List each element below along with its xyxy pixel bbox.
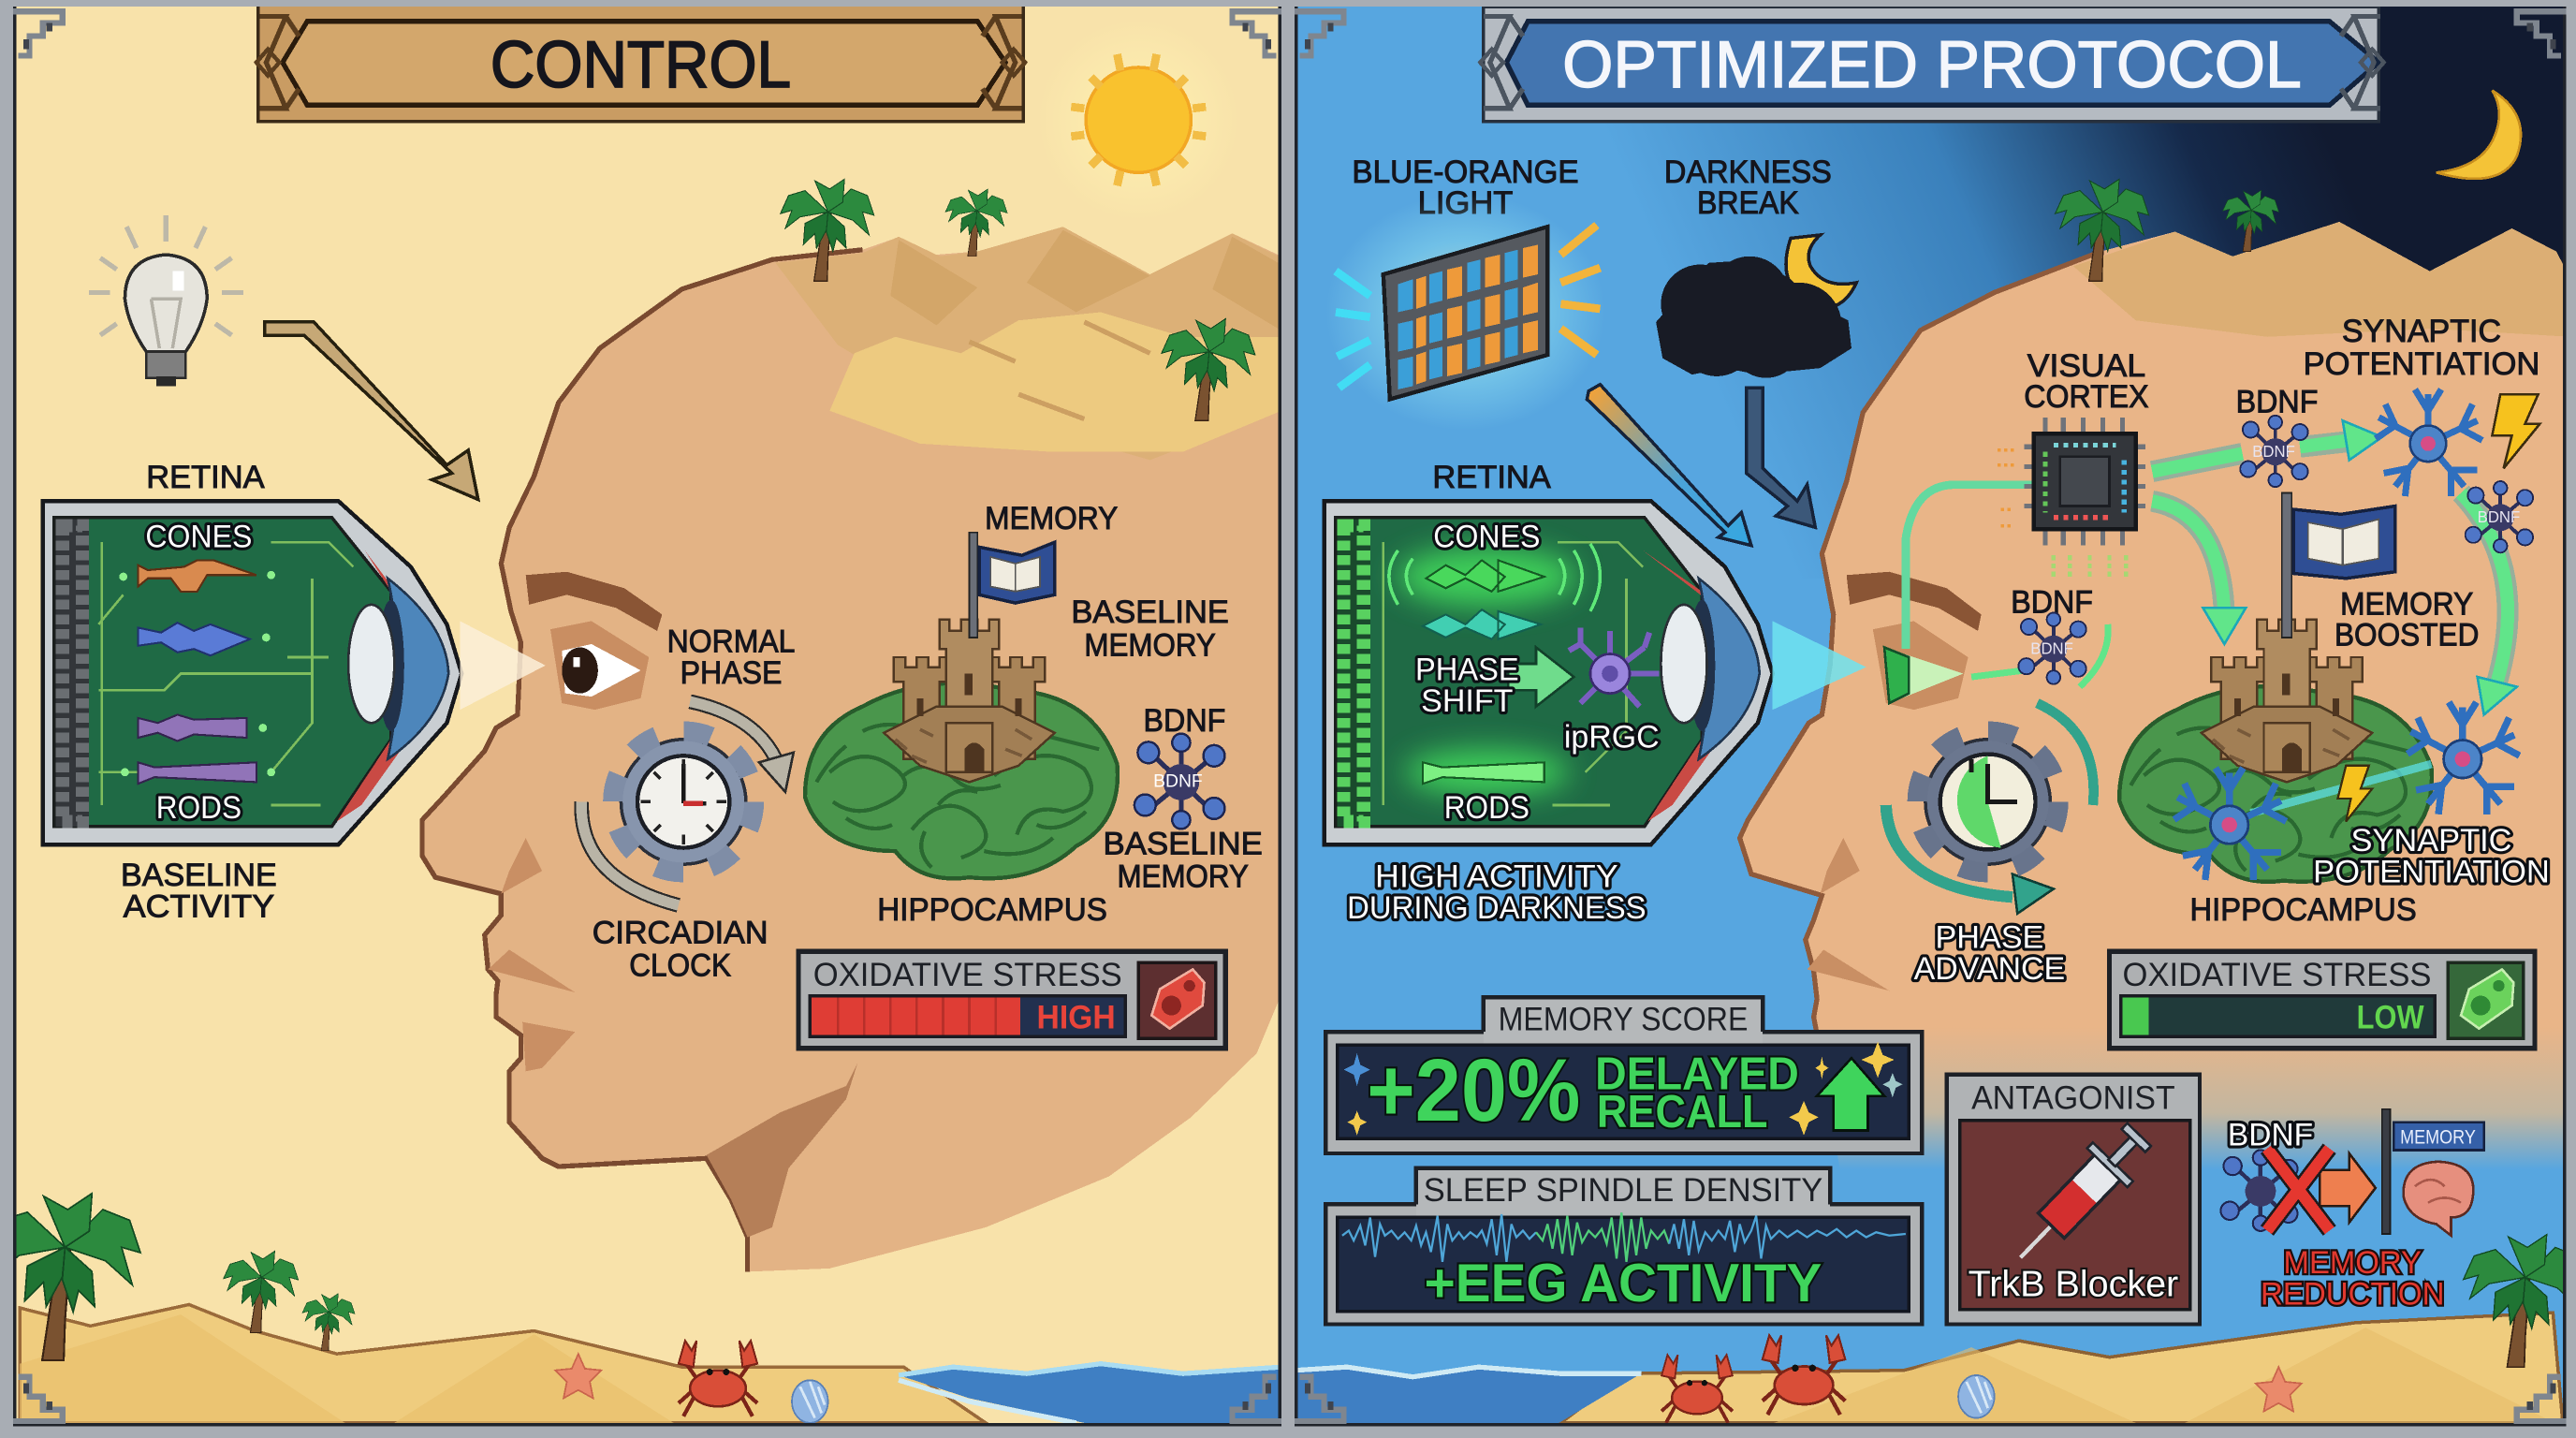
palm: optimized forehead left xyxy=(2056,179,2149,281)
crab xyxy=(679,1341,757,1416)
beach scene (control) xyxy=(0,1194,1281,1423)
title: optimized protocol banner xyxy=(1480,7,2384,122)
panel: oxidative stress high: HIGH xyxy=(1036,1000,1116,1036)
flag: memory boosted xyxy=(2282,493,2395,638)
palm xyxy=(2464,1235,2576,1367)
label: synaptic potentiation (top): SYNAPTIC xyxy=(2342,314,2501,349)
panel: sleep spindle density xyxy=(1325,1168,1922,1325)
icon: bdnf molecule (cortex pathway): BDNF xyxy=(2252,442,2295,461)
icon: lightning bolt xyxy=(2492,394,2539,468)
label: bdnf (cortex pathway): BDNF xyxy=(2236,385,2318,420)
icon: bdnf molecule (right) xyxy=(2466,481,2533,552)
moon (night sky) xyxy=(2437,91,2521,179)
panel: retina chip (control) xyxy=(43,501,461,844)
circuit traces xyxy=(98,542,353,805)
icon: bdnf molecule (right): BDNF xyxy=(2478,507,2521,526)
sidebar xyxy=(56,520,89,827)
label: synaptic potentiation (top) xyxy=(2304,314,2539,382)
icon: blocked bdnf pathway xyxy=(2220,1149,2376,1231)
icon: neuron (top) xyxy=(2376,389,2482,496)
palm: optimized forehead right xyxy=(2223,190,2279,252)
label: phase shift: SHIFT xyxy=(1421,683,1514,719)
icon: circadian clock (optimized) xyxy=(1886,703,2094,914)
label: bdnf (eye pathway): BDNF xyxy=(2011,585,2093,621)
glowing cone icons xyxy=(1389,544,1600,784)
brain: hippocampus island (control) xyxy=(805,683,1118,878)
label: phase advance: ADVANCE xyxy=(1914,951,2065,987)
label: ipRGC: ipRGC xyxy=(1564,720,1660,756)
label: memory (control flag): MEMORY xyxy=(985,501,1119,536)
label: rods: RODS xyxy=(1444,790,1530,826)
label: darkness break: DARKNESS xyxy=(1664,154,1832,190)
arrow: cortex to bdnf to neuron xyxy=(2152,420,2382,472)
water xyxy=(1296,1367,1641,1423)
label: circadian clock: CIRCADIAN xyxy=(593,915,768,950)
starfish xyxy=(555,1354,601,1399)
label: phase advance xyxy=(1914,920,2065,987)
panel: memory score: +20% xyxy=(1367,1041,1580,1140)
label: baseline activity: BASELINE xyxy=(121,858,277,893)
label: synaptic potentiation (top): POTENTIATION xyxy=(2304,346,2539,382)
label: cones: CONES xyxy=(145,519,252,554)
palm: tiny xyxy=(302,1294,355,1351)
palm: control forehead middle xyxy=(945,189,1007,257)
light beam (optimized) xyxy=(1773,621,1866,710)
panel: oxidative stress low: LOW xyxy=(2357,1000,2424,1036)
label: darkness break xyxy=(1664,154,1832,221)
circuit traces xyxy=(1383,542,1643,805)
starfish xyxy=(2256,1367,2302,1412)
label: synaptic potentiation (bottom): POTENTIATION xyxy=(2313,854,2550,889)
label: blue-orange light: BLUE-ORANGE xyxy=(1352,154,1579,190)
arrow: neuron to hippocampus neurons xyxy=(2461,493,2517,714)
label: normal phase: NORMAL xyxy=(667,624,795,660)
label: baseline memory (bdnf): BASELINE xyxy=(1104,827,1263,862)
panel: control background xyxy=(0,0,1288,1438)
label: high activity during darkness xyxy=(1347,859,1647,926)
panel: memory score: MEMORY SCORE xyxy=(1499,1001,1748,1037)
icon: visual cortex chip xyxy=(1998,418,2145,579)
lips and nose shading xyxy=(488,838,575,1071)
icon: bdnf molecule (control) xyxy=(1134,734,1224,829)
castle (control) xyxy=(884,620,1055,782)
icon: eye (optimized) xyxy=(1847,572,1982,710)
icon: sun xyxy=(1036,18,1240,222)
light beam (control) xyxy=(460,621,546,710)
label: baseline memory (bdnf) xyxy=(1104,827,1263,895)
panel: sleep spindle density: +EEG ACTIVITY xyxy=(1425,1254,1822,1313)
arrow: phase shift xyxy=(1508,647,1573,707)
flag: memory (control) xyxy=(970,533,1055,638)
label: rods: RODS xyxy=(156,790,242,826)
label: baseline activity xyxy=(121,858,277,924)
arrow: light to eye (control) xyxy=(265,322,478,500)
label: synaptic potentiation (bottom): SYNAPTIC xyxy=(2351,823,2511,858)
label: memory boosted: BOOSTED xyxy=(2334,618,2479,653)
sparkles xyxy=(1347,1042,1895,1136)
palm: small xyxy=(224,1251,299,1332)
label: circadian clock xyxy=(593,915,768,983)
panel: antagonist xyxy=(1947,1075,2200,1325)
label: memory reduction xyxy=(2261,1245,2445,1312)
eye cross-section xyxy=(337,550,448,822)
crab xyxy=(1661,1355,1733,1423)
dunes xyxy=(2073,222,2571,337)
icon: bdnf molecule with small arrow xyxy=(1971,612,2108,687)
dunes xyxy=(775,227,1281,460)
label: visual cortex xyxy=(2024,348,2149,415)
shell xyxy=(792,1380,828,1423)
label: phase advance: PHASE xyxy=(1935,920,2043,956)
icon: ipRGC neuron xyxy=(1569,627,1660,707)
label: memory reduction: REDUCTION xyxy=(2261,1276,2445,1312)
label: circadian clock: CLOCK xyxy=(629,947,731,983)
label: blue-orange light xyxy=(1352,154,1579,221)
label: synaptic potentiation (bottom) xyxy=(2313,823,2550,889)
title: control banner xyxy=(256,5,1025,122)
eeg waveform xyxy=(1342,1212,1906,1262)
palm: left large xyxy=(0,1194,140,1360)
palm: control forehead right xyxy=(1162,318,1255,420)
panel: oxidative stress low xyxy=(2110,951,2535,1049)
neck shadow xyxy=(707,1064,857,1238)
panel: memory score: RECALL xyxy=(1597,1087,1767,1137)
nose shading xyxy=(1808,838,1889,990)
arrow: cortex to castle xyxy=(2152,501,2246,644)
icon: bdnf molecule (control): BDNF xyxy=(1153,772,1203,792)
shell xyxy=(1958,1375,1995,1418)
head: optimized profile with dunes xyxy=(1740,222,2571,1170)
panel: oxidative stress high: OXIDATIVE STRESS xyxy=(813,957,1122,993)
label: cones: CONES xyxy=(1433,519,1540,554)
icon: eye (control) xyxy=(526,572,662,710)
panel: memory score xyxy=(1325,997,1922,1153)
pathway: eye to visual cortex xyxy=(1906,485,2034,649)
flag: memory with brain xyxy=(2382,1109,2484,1236)
flag: memory with brain: MEMORY xyxy=(2400,1126,2476,1148)
label: memory boosted xyxy=(2334,586,2479,653)
icon: light bulb xyxy=(89,215,243,386)
panel: memory score: DELAYED xyxy=(1595,1049,1799,1100)
cone icons xyxy=(119,560,275,784)
beach scene (optimized) xyxy=(1296,1235,2576,1423)
head: control profile with desert dunes xyxy=(422,227,1281,1271)
icon: bdnf molecule (cortex pathway) xyxy=(2240,416,2308,487)
label: visual cortex: VISUAL xyxy=(2027,348,2145,384)
crab xyxy=(1763,1335,1845,1415)
label: phase shift: PHASE xyxy=(1415,653,1519,688)
icon: circadian clock (control) xyxy=(581,701,794,905)
arrow: blue-orange light to eye xyxy=(1587,385,1751,546)
label: visual cortex: CORTEX xyxy=(2024,379,2149,415)
label: normal phase xyxy=(667,624,795,691)
label: baseline memory (castle): MEMORY xyxy=(1084,627,1216,663)
label: phase shift xyxy=(1415,653,1519,719)
eye cross-section xyxy=(1643,550,1760,822)
label: baseline memory (bdnf): MEMORY xyxy=(1117,859,1249,895)
label: bdnf (blocked): BDNF xyxy=(2228,1117,2313,1152)
icon: bdnf molecule with small arrow: BDNF xyxy=(2030,639,2073,658)
green glow xyxy=(1397,547,1577,795)
label: retina (optimized): RETINA xyxy=(1432,460,1551,495)
title: optimized protocol banner: OPTIMIZED PROTOCOL xyxy=(1562,27,2302,101)
palm: control forehead left xyxy=(781,179,874,281)
label: baseline memory (castle): BASELINE xyxy=(1071,594,1229,630)
arrow: up xyxy=(1817,1058,1884,1130)
label: bdnf (control): BDNF xyxy=(1144,703,1225,739)
brain: hippocampus island (optimized) xyxy=(2119,686,2432,882)
panel: oxidative stress low: OXIDATIVE STRESS xyxy=(2123,957,2431,993)
panel: antagonist: TrkB Blocker xyxy=(1969,1265,2178,1305)
label: high activity during darkness: HIGH ACTIVITY xyxy=(1375,859,1618,895)
label: retina (control): RETINA xyxy=(146,460,265,495)
panel: oxidative stress high xyxy=(798,951,1225,1049)
panel: retina chip (optimized) xyxy=(1325,501,1773,844)
label: hippocampus (optimized): HIPPOCAMPUS xyxy=(2190,892,2417,928)
label: memory boosted: MEMORY xyxy=(2340,586,2473,622)
sidebar xyxy=(1338,520,1370,827)
icon: blue-orange LED panel xyxy=(1325,194,1605,431)
label: darkness break: BREAK xyxy=(1697,185,1799,221)
label: normal phase: PHASE xyxy=(681,655,782,691)
title: control banner: CONTROL xyxy=(490,27,791,101)
panel: sleep spindle density: SLEEP SPINDLE DENSITY xyxy=(1424,1172,1822,1209)
icon: dark cloud with moon xyxy=(1656,235,1856,378)
label: baseline activity: ACTIVITY xyxy=(124,888,274,924)
icon: hippocampal neurons with spark xyxy=(2174,702,2520,880)
panel: optimized protocol background xyxy=(1288,0,2576,1438)
arrow: darkness to eye xyxy=(1747,388,1815,527)
panel: antagonist: ANTAGONIST xyxy=(1971,1080,2175,1117)
water xyxy=(899,1364,1281,1423)
label: blue-orange light: LIGHT xyxy=(1418,185,1514,221)
castle (optimized) xyxy=(2202,620,2372,782)
label: high activity during darkness: DURING DARKNESS xyxy=(1347,890,1647,926)
label: baseline memory (castle) xyxy=(1071,594,1229,663)
label: memory reduction: MEMORY xyxy=(2284,1245,2422,1281)
icon: syringe xyxy=(2000,1115,2159,1277)
label: hippocampus (control): HIPPOCAMPUS xyxy=(877,892,1107,928)
